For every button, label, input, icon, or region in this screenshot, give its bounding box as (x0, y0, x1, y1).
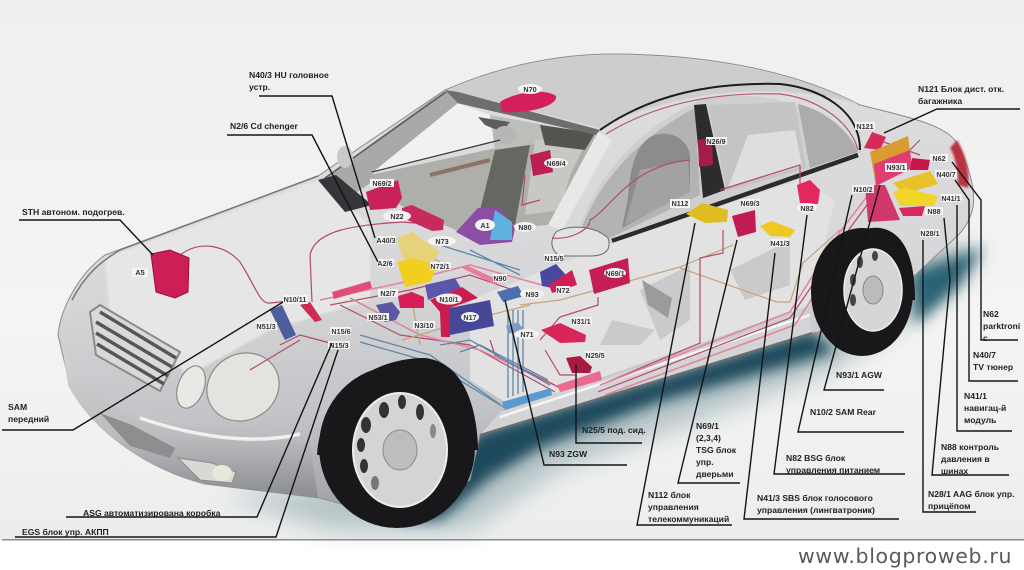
module labels: N40/7 (936, 170, 956, 179)
callout: ASG: ASG автоматизирована коробка (83, 508, 221, 518)
watermark: www.blogproweb.ru (798, 544, 1012, 568)
module labels: N69/2 (372, 179, 392, 188)
module: N112 (686, 203, 728, 223)
callout: N40/3: N40/3 HU головное (249, 70, 329, 80)
callout: N88 (932, 218, 1009, 476)
callout: N69/1 TSG: упр. (696, 457, 714, 467)
windshield lower dark line (372, 140, 500, 172)
callout: N82 BSG (774, 215, 905, 475)
rear wheel (811, 228, 915, 356)
callout: N93 ZGW (505, 300, 627, 465)
callout: N93/1 AGW: N93/1 AGW (836, 370, 883, 380)
callout: N41/1: N41/1 (964, 391, 987, 401)
module labels: N73 (435, 237, 449, 246)
module labels: A40/3 (376, 236, 396, 245)
module labels: A1 (480, 221, 490, 230)
lower bumper mesh (100, 413, 175, 458)
callout: EGS (15, 350, 338, 537)
cabin interior behind windshield (370, 128, 598, 232)
module labels: N17 (463, 313, 477, 322)
module labels: N28/1 (920, 229, 940, 238)
window top frame (600, 84, 860, 150)
rear window (708, 102, 806, 191)
engine bay lines (340, 305, 555, 392)
callout: N82 BSG: управления питанием (786, 465, 880, 475)
roof and seat cables (522, 175, 540, 205)
blue lines to block (360, 335, 505, 408)
callout: N40/3: устр. (249, 82, 270, 92)
headlight (171, 340, 292, 434)
callout: N41/1: модуль (964, 415, 996, 425)
arch (317, 358, 478, 455)
module: pink sill bar (557, 371, 602, 392)
module labels: N71 (520, 330, 534, 339)
callout: N88: давления в (941, 454, 990, 464)
callout: N25/5: N25/5 под. сид. (582, 425, 646, 435)
module: N17 (450, 300, 494, 335)
module: N22 (402, 205, 444, 231)
left mirror behind windshield (337, 146, 353, 168)
callout: N121 (884, 84, 1020, 133)
callout: N10/2: N10/2 SAM Rear (810, 407, 877, 417)
rear quarter window (798, 104, 858, 168)
module labels: N72 (556, 286, 570, 295)
module: N82 (797, 180, 820, 204)
A5 loop cable (180, 246, 300, 303)
module labels: N41/1 (941, 194, 961, 203)
module labels: N69/1 (605, 269, 625, 278)
module labels: N26/9 (706, 137, 726, 146)
front window interior (578, 108, 700, 238)
callout: N41/1: навигац-й (964, 403, 1006, 413)
callout: N41/1 (957, 205, 1012, 431)
callout: N41/3 SBS: N41/3 SBS блок голосового (757, 493, 873, 503)
callout: N112: N112 блок (648, 490, 691, 500)
module labels: N10/2 (853, 185, 873, 194)
rim slots (357, 395, 436, 490)
module labels: N51/3 (256, 322, 276, 331)
module labels: N62 (932, 154, 946, 163)
module: N69/2 (366, 180, 402, 210)
rear seat (728, 130, 802, 188)
front wheel (317, 358, 478, 528)
module: N31/1 (541, 323, 586, 343)
front seat (622, 134, 690, 228)
door window frame (575, 96, 862, 243)
fog lamp (178, 458, 236, 483)
callout: N82 BSG: N82 BSG блок (786, 453, 846, 463)
center console (478, 145, 530, 225)
module labels: N93/1 (886, 163, 906, 172)
module: N69/3 (732, 210, 756, 237)
cowl dark wedge (318, 175, 372, 212)
callout: SAM front: SAM (8, 402, 27, 412)
grille (90, 305, 180, 391)
seat rail dark (642, 280, 672, 318)
callout: N112 (637, 223, 732, 525)
pink verticals (600, 230, 723, 385)
module labels: N93 (525, 290, 539, 299)
module labels: N90 (493, 274, 507, 283)
callout: N69/1 TSG (678, 240, 740, 483)
callout: STH (19, 207, 153, 255)
callout: N41/3 SBS: управления (лингватроник) (757, 505, 875, 515)
module labels: N15/3 (329, 341, 349, 350)
callout: N62: c (983, 333, 988, 343)
callout: N88: шинах (941, 466, 968, 476)
car illustration (58, 54, 974, 528)
rear view mirror (478, 117, 510, 132)
hood highlight (105, 180, 370, 375)
hood edge (72, 176, 318, 300)
module labels: N10/11 (284, 295, 306, 304)
callout: SAM front (2, 302, 283, 430)
module labels: N88 (927, 207, 941, 216)
b pillar (694, 104, 725, 198)
callout: N69/1 TSG: N69/1 (696, 421, 719, 431)
bumper lip (140, 418, 300, 439)
wiring harness (180, 140, 920, 408)
window belt line (612, 155, 858, 241)
callout: N69/1 TSG: дверьми (696, 469, 734, 479)
module: A40/3 radio (397, 232, 440, 265)
module labels: N82 (800, 204, 814, 213)
callout: N69/1 TSG: (2,3,4) (696, 433, 721, 443)
callout: N112: телекоммуникаций (648, 514, 729, 524)
a pillar (322, 90, 458, 200)
callout: N28/1 (923, 240, 1014, 512)
cabin floor cutaway (470, 180, 835, 405)
car body (58, 54, 974, 520)
module: N26/9 (698, 137, 713, 167)
tan lines (520, 245, 733, 305)
door sill (480, 313, 812, 435)
callout: N88: N88 контроль (941, 442, 999, 452)
bundle to firewall (320, 265, 560, 300)
module: blue block (502, 388, 552, 410)
module: N10/1 (425, 278, 478, 337)
module: N25/5 (566, 356, 592, 373)
module labels: N72/1 (430, 262, 450, 271)
callout: STH: STH автоном. подогрев. (22, 207, 125, 217)
callout: N62 (952, 162, 1020, 343)
module: N41/3 (760, 221, 795, 237)
callout: N40/7: TV тюнер (973, 362, 1013, 372)
module: rear red fill (865, 185, 900, 222)
windshield opening (373, 103, 494, 172)
module: N90 bar (462, 265, 498, 285)
callout: N93/1 AGW (824, 185, 884, 390)
module: N69/4 (530, 150, 553, 176)
dash wood trim (430, 160, 490, 175)
a post white frame (548, 132, 612, 230)
callout: N10/2 (798, 195, 904, 432)
callout: N40/7: N40/7 (973, 350, 996, 360)
module labels: N22 (390, 212, 404, 221)
engine bay loop (310, 222, 440, 302)
module labels: N15/5 (544, 254, 564, 263)
label texts: A5 (135, 268, 145, 277)
rear seat in cabin (525, 135, 590, 215)
callout: ASG (66, 343, 332, 518)
module: N15/5 (540, 264, 566, 288)
glass rear portion (490, 115, 590, 150)
rear parcel shelf dark (540, 125, 595, 150)
module labels: N31/1 (571, 317, 591, 326)
seat base shading (600, 240, 790, 345)
module: N93/1 (870, 136, 912, 186)
callout: N25/5 (576, 365, 646, 443)
module labels: N69/4 (546, 159, 566, 168)
callout: N62: N62 (983, 309, 999, 319)
callout: SAM front: передний (8, 414, 49, 424)
module labels: N25/5 (585, 351, 605, 360)
callout: EGS: EGS блок упр. АКПП (22, 527, 109, 537)
image bottom border (2, 539, 1024, 540)
callout: N112: управления (648, 502, 699, 512)
callout: N69/1 TSG: TSG блок (696, 445, 737, 455)
module: small pink (300, 302, 322, 322)
callout: N41/3 SBS (744, 253, 899, 519)
door mirror (552, 227, 609, 256)
callout: N40/3 (249, 70, 375, 238)
callout: N121: багажника (918, 96, 962, 106)
module: pink bar (332, 281, 372, 299)
module: N51/3 (270, 305, 296, 340)
module labels (132, 84, 962, 360)
module: N71 block (506, 322, 524, 334)
callout: N93 ZGW: N93 ZGW (549, 449, 588, 459)
callout: N2/6: N2/6 Cd chenger (230, 121, 298, 131)
callout: N62: parktroni (983, 321, 1020, 331)
module labels: N70 (523, 85, 537, 94)
callout: N40/7 (955, 180, 1018, 381)
module labels: A2/6 (377, 259, 393, 268)
module: N93 block (497, 286, 524, 302)
module: N72 (549, 270, 577, 293)
module: N40/7 (893, 171, 938, 194)
module: N41/1 (893, 188, 938, 206)
module: N2/7 (398, 292, 424, 308)
roof panel (448, 55, 858, 128)
module: N88 (899, 206, 925, 216)
module: N70 (500, 92, 556, 112)
a pillar edge (325, 92, 446, 178)
rim (353, 393, 447, 507)
module labels: N69/3 (740, 199, 760, 208)
roof front bar (445, 90, 600, 135)
callout: N28/1: N28/1 AAG блок упр. (928, 489, 1014, 499)
ground shadow under car (220, 240, 985, 530)
module labels: N80 (518, 223, 532, 232)
module labels: N112 (672, 199, 688, 208)
module: A5 heater (151, 250, 189, 298)
module: A1 (456, 208, 515, 245)
arch (812, 228, 915, 300)
module labels: N121 (856, 122, 874, 131)
label chips (132, 84, 962, 359)
module: A2/6 changer (397, 258, 438, 287)
module labels: N10/1 (439, 295, 459, 304)
module labels: N53/1 (368, 313, 388, 322)
callout: N28/1: прицёпом (928, 501, 970, 511)
module: N62 (910, 158, 930, 170)
rear lamp (950, 140, 969, 188)
module labels: N15/6 (331, 327, 351, 336)
module: N53/1 (376, 302, 400, 322)
module labels: N41/3 (770, 239, 790, 248)
callout: N2/6 (227, 121, 378, 262)
module: N121 (864, 132, 886, 150)
module labels: N3/10 (414, 321, 434, 330)
front bumper (62, 345, 318, 498)
module: N69/1 (589, 258, 630, 294)
module labels: N2/7 (380, 289, 396, 298)
sill bundle (600, 195, 868, 385)
callout: N121: N121 Блок дист. отк. (918, 84, 1004, 94)
